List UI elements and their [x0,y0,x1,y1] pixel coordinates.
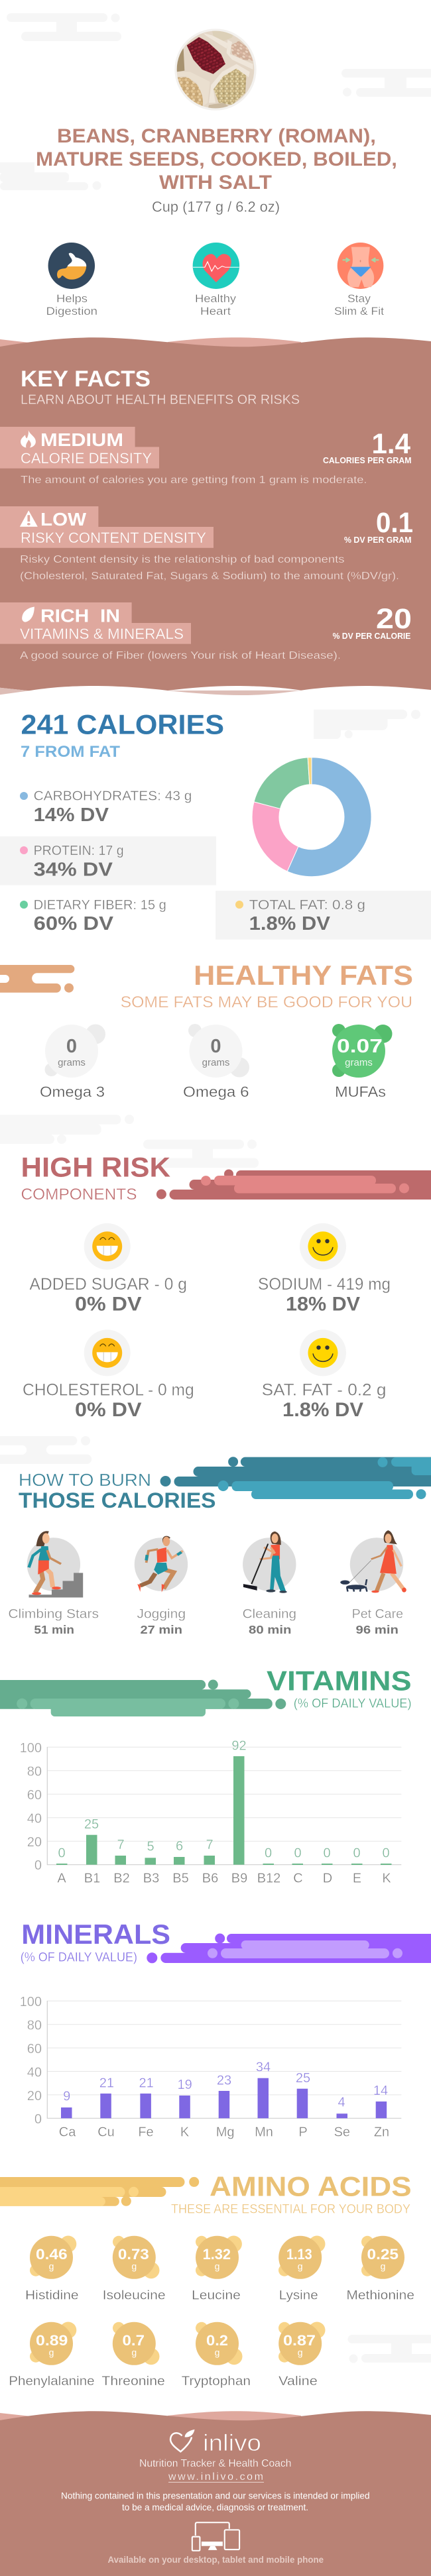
activity: pet care: 96 min [355,1623,399,1636]
heading: key facts: KEY FACTS [21,366,151,392]
illustration: woman on stairs [27,1531,83,1598]
bar chart: vitamins: B1 [84,1872,100,1886]
bar chart: minerals: Se [334,2125,350,2140]
fact: risky content density: 0.1 [376,508,413,539]
activity: jogging [135,1536,188,1636]
bar chart: vitamins: E [353,1872,361,1886]
bar chart: minerals: 9 [63,2089,70,2103]
bar chart: vitamins: B2 [113,1872,130,1886]
benefit: stay slim and fit: Slim & Fit [334,305,384,317]
bar chart: vitamins: B9 [231,1872,247,1886]
bar chart: minerals: 4 [338,2095,345,2109]
bar chart: minerals: Fe [138,2125,154,2140]
amino: tryptophan: Tryptophan [182,2374,251,2388]
bar chart: minerals: 0 [34,2112,42,2127]
cloud: burn [160,1457,431,1499]
activity: climbing stairs: Climbing Stars [8,1607,99,1621]
heading: VITAMINS [267,1665,412,1697]
amino: tryptophan [182,2322,251,2388]
bar chart: vitamins: B3 [143,1872,159,1886]
heading: MINERALS [21,1919,170,1950]
icon: devices [192,2522,239,2551]
bar chart: vitamins: B5 [172,1872,189,1886]
amino: tryptophan: 0.2 [206,2332,228,2349]
bar chart: minerals: Ca [59,2125,76,2140]
activity: cleaning: Cleaning [243,1607,296,1621]
benefit: stay slim and fit: Stay [347,292,371,305]
illustration: woman sweeping [243,1532,296,1593]
subheading: (% OF DAILY VALUE) [294,1697,412,1711]
bar chart: vitamins: K [382,1872,391,1886]
disclaimer: Nothing contained in this presentation and our services is intended or implied [61,2491,370,2501]
benefit: healthy heart: Heart [200,305,231,317]
fact: risky content density: % DV PER GRAM [344,535,411,545]
bar chart: vitamins: D [323,1872,332,1886]
amino: histidine: Histidine [25,2288,79,2302]
amino: threonine [101,2322,165,2388]
fact: calorie density: CALORIE DENSITY [21,450,152,467]
bar chart: vitamins: 5 [147,1840,154,1854]
section: high risk components [21,1152,431,1421]
amino: lysine [278,2236,325,2302]
bar chart: minerals: 100 [20,1995,42,2009]
amino: phenylalanine: 0.89 [36,2332,68,2349]
bar chart: vitamins: 92 [231,1739,247,1754]
cloud: healthy fats [0,965,74,993]
legend: dietary fiber [20,898,166,934]
activity: climbing stairs: 51 min [34,1623,74,1636]
subheading: THESE ARE ESSENTIAL FOR YOUR BODY [171,2202,410,2216]
fact: risky content density: (Cholesterol, Saturated Fat, Sugars & Sodium) to the amount (%DV/gr). [20,571,399,582]
bar chart: minerals: 23 [217,2073,231,2088]
amino: methionine: 0.25 [367,2246,399,2263]
fact: calorie density: MEDIUM [40,429,123,450]
title: WITH SALT [159,172,272,194]
sodium [258,1223,391,1315]
saturated fat: SAT. FAT - 0.2 g [262,1381,386,1400]
fact: risky content density: Risky Content density is the relationship of bad components [20,554,345,565]
mufas: MUFAs [335,1084,386,1100]
bar chart: minerals: Cu [97,2125,115,2140]
bar chart: vitamins: 0 [323,1846,331,1861]
omega 3 [40,1025,105,1100]
fact: risky content density: RISKY CONTENT DENSITY [21,530,206,546]
heading line 1: HOW TO BURN [19,1470,151,1490]
fact: calorie density: CALORIES PER GRAM [323,456,411,465]
subheading: COMPONENTS [21,1186,137,1204]
bar chart: minerals: 40 [27,2065,42,2080]
cloud: amino acids [0,2177,199,2206]
legend background: total fat [216,891,431,940]
fact: rich in vitamins and minerals: VITAMINS & MINERALS [20,626,184,642]
saturated fat: 1.8% DV [282,1399,363,1421]
amino: lysine: 1.13 [286,2246,312,2263]
amino: valine: g [298,2347,303,2358]
activity: climbing stairs [8,1531,99,1636]
bar chart: minerals: 60 [27,2042,42,2056]
section: how to burn calories [8,1457,431,1636]
bar chart: vitamins: C [293,1872,303,1886]
disclaimer: to be a medical advice, diagnosis or treatment. [122,2502,308,2512]
fact: calorie density: The amount of calories you are getting from 1 gram is moderate. [21,475,367,486]
benefit: healthy heart: Healthy [195,292,237,305]
bar chart: minerals: 34 [256,2060,271,2075]
bar chart: minerals: 80 [27,2019,42,2033]
amino: isoleucine: g [131,2261,137,2272]
fact: risky content density [0,506,413,582]
icon: heart [193,243,239,289]
logo: inlivo [203,2430,261,2456]
amino: isoleucine [103,2236,166,2302]
subheading: SOME FATS MAY BE GOOD FOR YOU [121,993,412,1011]
bar chart: vitamins: 7 [206,1838,214,1852]
bar chart: vitamins: 0 [58,1846,66,1861]
decorative cloud: mid left [0,162,101,190]
bar chart: minerals [20,1995,401,2140]
heading: AMINO ACIDS [210,2171,412,2202]
bar chart: vitamins: 0 [353,1846,361,1861]
added sugar [29,1223,187,1315]
amino: leucine: 1.32 [203,2246,231,2263]
amino: threonine: 0.7 [122,2332,145,2349]
icon: warning triangle [20,510,38,527]
amino: phenylalanine: Phenylalanine [9,2374,95,2388]
website: www.inlivo.com [168,2471,263,2483]
omega 6 [183,1024,249,1100]
activity: jogging: Jogging [137,1607,186,1621]
legend: total fat: 1.8% DV [249,913,331,934]
cholesterol: 0% DV [75,1399,142,1421]
cholesterol: CHOLESTEROL - 0 mg [23,1381,194,1400]
legend: carbohydrates [20,789,192,826]
legend: protein: 34% DV [34,860,113,881]
benefit: healthy heart [193,243,239,317]
bar chart: minerals: 21 [99,2076,114,2090]
bar chart: minerals: 19 [177,2078,192,2092]
benefit: helps digestion: Digestion [46,305,97,317]
amino: histidine [25,2236,79,2302]
heading: HIGH RISK [21,1152,170,1183]
amino: methionine [346,2236,414,2302]
title: MATURE SEEDS, COOKED, BOILED, [36,148,397,170]
amino: leucine: Leucine [192,2288,241,2302]
bar chart: vitamins: 0 [294,1846,302,1861]
bar chart: minerals: 25 [296,2071,310,2086]
fact: rich in vitamins and minerals: RICH IN [40,606,120,626]
icon: flame [21,430,36,447]
decorative cloud: bottom right [347,2335,431,2363]
omega 3: 0 [66,1036,77,1057]
activity: jogging: 27 min [141,1623,182,1636]
cloud: vitamins [0,1679,286,1716]
fact: rich in vitamins and minerals [0,602,412,661]
food photo: beans in sacks [174,28,257,111]
cloud: high risk [156,1169,431,1200]
mufas: 0.07 [337,1036,383,1057]
amino: lysine: Lysine [279,2288,318,2302]
section: vitamins [0,1665,412,1886]
amino: lysine: g [298,2261,303,2272]
fact: calorie density: 1.4 [371,429,410,460]
heading: calories: 241 CALORIES [21,709,224,740]
footer panel [0,2411,431,2576]
subheading: (% OF DAILY VALUE) [21,1950,137,1964]
decorative cloud: calories [314,710,420,739]
activity: cleaning: 80 min [249,1623,292,1636]
bar chart: vitamins: 7 [117,1838,125,1852]
legend: carbohydrates: CARBOHYDRATES: 43 g [34,789,192,804]
bar chart: vitamins: 25 [84,1817,99,1832]
amino: isoleucine: Isoleucine [103,2288,166,2302]
heading line 2: THOSE CALORIES [19,1488,216,1512]
bar chart: minerals: Zn [374,2125,389,2140]
bar chart: minerals: Mn [255,2125,273,2140]
legend: total fat: TOTAL FAT: 0.8 g [249,898,365,913]
omega 6: Omega 6 [183,1084,249,1100]
added sugar: ADDED SUGAR - 0 g [29,1275,187,1294]
bar chart: minerals: K [180,2125,190,2140]
cloud: minerals [147,1934,431,1963]
subheading: LEARN ABOUT HEALTH BENEFITS OR RISKS [21,392,300,407]
heading: HEALTHY FATS [194,960,413,991]
activity: pet care: Pet Care [352,1607,403,1621]
subheading: from fat: 7 FROM FAT [21,743,120,761]
bar chart: minerals: P [298,2125,308,2140]
bar chart: vitamins: 0 [34,1858,42,1873]
fact: calorie density [0,427,411,486]
bar chart: minerals: 21 [139,2076,154,2090]
amino: valine: Valine [278,2374,318,2388]
fact: risky content density: LOW [40,509,87,530]
icon: stomach [48,243,95,289]
amino: methionine: Methionine [346,2288,414,2302]
disclaimer [61,2491,370,2512]
icon: slim waist [338,243,383,289]
benefit: helps digestion: Helps [56,292,88,305]
serving size: Cup (177 g / 6.2 oz) [152,199,280,215]
legend: dietary fiber: 60% DV [34,913,114,934]
legend: protein: PROTEIN: 17 g [34,844,124,858]
mufas: grams [345,1057,373,1068]
fact: rich in vitamins and minerals: % DV PER CALORIE [333,632,410,641]
amino: methionine: g [381,2261,385,2272]
donut chart [252,757,371,877]
sodium: 18% DV [286,1294,360,1315]
amino: valine [278,2322,325,2388]
amino: phenylalanine [9,2322,95,2388]
decorative cloud: top right [341,69,431,97]
decorative cloud: above high risk left [0,1115,134,1144]
amino: histidine: 0.46 [36,2246,68,2263]
legend: dietary fiber: DIETARY FIBER: 15 g [34,898,166,913]
bar chart: vitamins: B12 [257,1872,280,1886]
amino: threonine: g [131,2347,137,2358]
amino: phenylalanine: g [49,2347,54,2358]
omega 3: grams [58,1057,86,1068]
amino: leucine [192,2236,242,2302]
panel: key facts [0,337,431,695]
legend background: protein [0,836,216,885]
section: amino acids [0,2171,414,2388]
availability note: Available on your desktop, tablet and mobile phone [107,2554,324,2565]
cholesterol [23,1329,194,1421]
section: minerals [20,1919,431,2140]
legend: carbohydrates: 14% DV [34,805,109,826]
activity: cleaning [243,1532,296,1636]
bar chart: minerals: 14 [373,2084,388,2098]
fact: rich in vitamins and minerals: A good source of Fiber (lowers Your risk of Heart Disease). [20,650,341,661]
bar chart: minerals: 20 [27,2089,42,2103]
amino: histidine: g [49,2261,54,2272]
decorative cloud: above high risk middle [143,1140,259,1168]
benefit: stay slim and fit [334,243,384,317]
benefit: helps digestion [46,243,97,317]
bar chart: vitamins [20,1739,401,1886]
legend: protein [20,844,124,881]
amino: isoleucine: 0.73 [118,2246,149,2263]
omega 6: grams [202,1057,229,1068]
sodium: SODIUM - 419 mg [258,1275,391,1294]
title: BEANS, CRANBERRY (ROMAN), [57,125,376,147]
added sugar: 0% DV [75,1294,142,1315]
bar chart: vitamins: B6 [202,1872,218,1886]
bar chart: vitamins: 60 [27,1788,42,1803]
amino: valine: 0.87 [283,2332,316,2349]
mufas [332,1024,393,1100]
bar chart: vitamins: 20 [27,1835,42,1850]
bar chart: vitamins: 80 [27,1764,42,1779]
illustration: woman walking dog [340,1530,406,1593]
activity: pet care [340,1530,406,1636]
legend: total fat [235,898,365,934]
title [36,125,397,194]
section: healthy fats [0,960,413,1100]
omega 3: Omega 3 [40,1084,105,1100]
logo [170,2430,261,2456]
bar chart: vitamins: 40 [27,1812,42,1826]
bar chart: vitamins: A [57,1872,66,1886]
bar chart: vitamins: 100 [20,1741,42,1756]
amino: threonine: Threonine [101,2374,165,2388]
amino: leucine: g [215,2261,219,2272]
bar chart: vitamins: 0 [265,1846,272,1861]
omega 6: 0 [210,1036,221,1057]
bar chart: vitamins: 0 [382,1846,390,1861]
bar chart: vitamins: 6 [176,1839,183,1854]
amino: tryptophan: g [215,2347,219,2358]
saturated fat [262,1329,386,1421]
bar chart: minerals: Mg [216,2125,234,2140]
decorative cloud: top left [7,13,121,41]
decorative cloud: above burn section [0,1436,92,1464]
icon: leaf [22,606,34,622]
illustration: runner [135,1536,188,1593]
fact: rich in vitamins and minerals: 20 [376,604,412,635]
tagline: Nutrition Tracker & Health Coach [139,2458,292,2469]
